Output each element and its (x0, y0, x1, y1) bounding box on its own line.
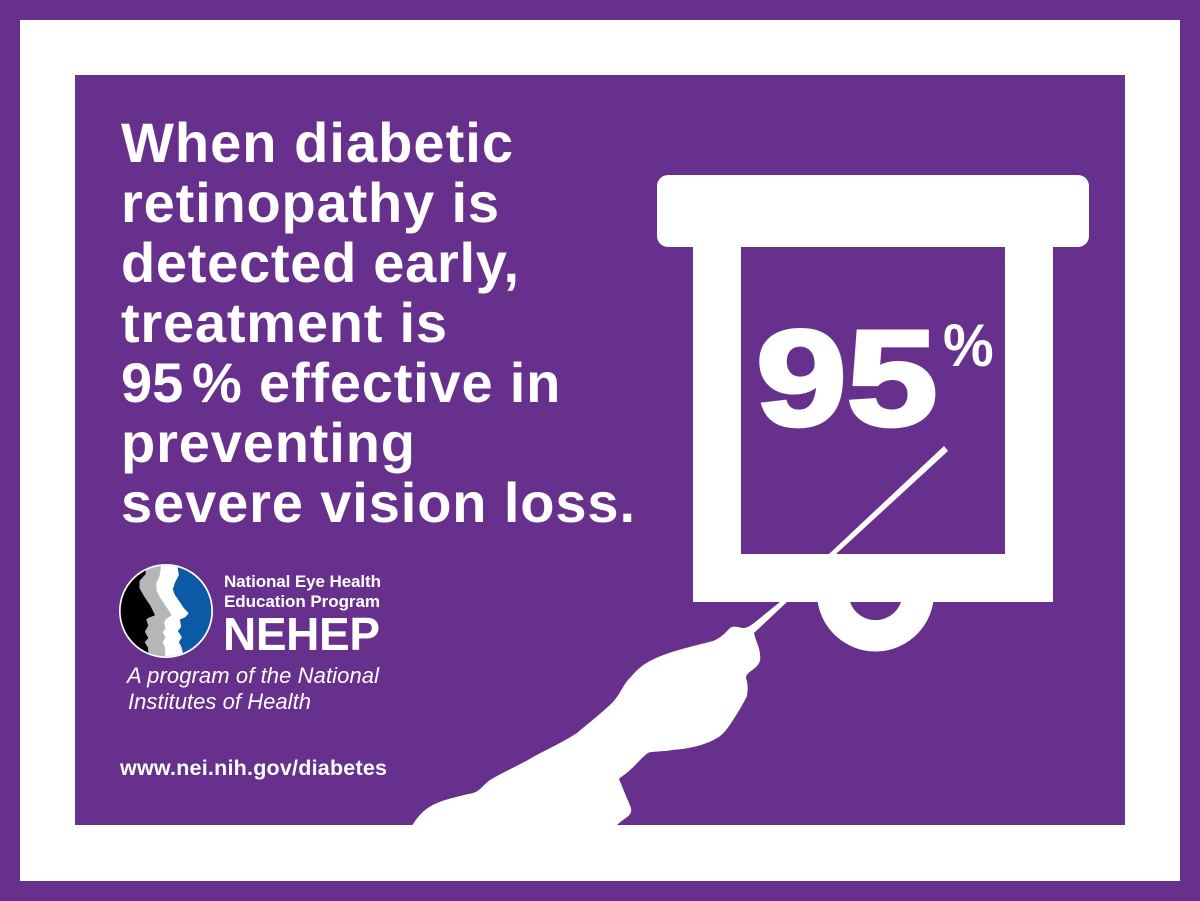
website url: www.nei.nih.gov/diabetes (119, 756, 387, 780)
stat: 95%: 95 (756, 302, 938, 454)
tagline: A program of the National (125, 663, 380, 688)
tagline (125, 663, 380, 714)
headline: When diabetic (121, 111, 513, 174)
logo: NEHEP: Education Program (224, 592, 380, 611)
icon: faces emblem (119, 564, 213, 658)
program name: National Eye Health (224, 572, 381, 591)
logo: NEHEP (119, 564, 380, 658)
stat: 95%: % (943, 313, 994, 379)
headline: effective in (259, 351, 561, 414)
NEHEP wordmark: NEHEP (223, 608, 380, 660)
headline: % (192, 351, 242, 414)
icon: hand holding pointer (412, 602, 787, 825)
screen frame (693, 240, 1053, 602)
headline: severe vision loss. (121, 471, 635, 534)
headline: 95 (121, 351, 183, 414)
screen pull ring (818, 602, 933, 651)
headline: detected early, (121, 231, 519, 294)
headline: preventing (121, 411, 415, 474)
tagline: Institutes of Health (128, 689, 311, 714)
headline: treatment is (121, 291, 447, 354)
headline: retinopathy is (121, 171, 499, 234)
headline (121, 111, 635, 534)
icon: projection screen (657, 175, 1089, 651)
screen roller (657, 175, 1089, 247)
pointer stick (829, 446, 948, 554)
panel: purple main panel (75, 75, 1125, 825)
